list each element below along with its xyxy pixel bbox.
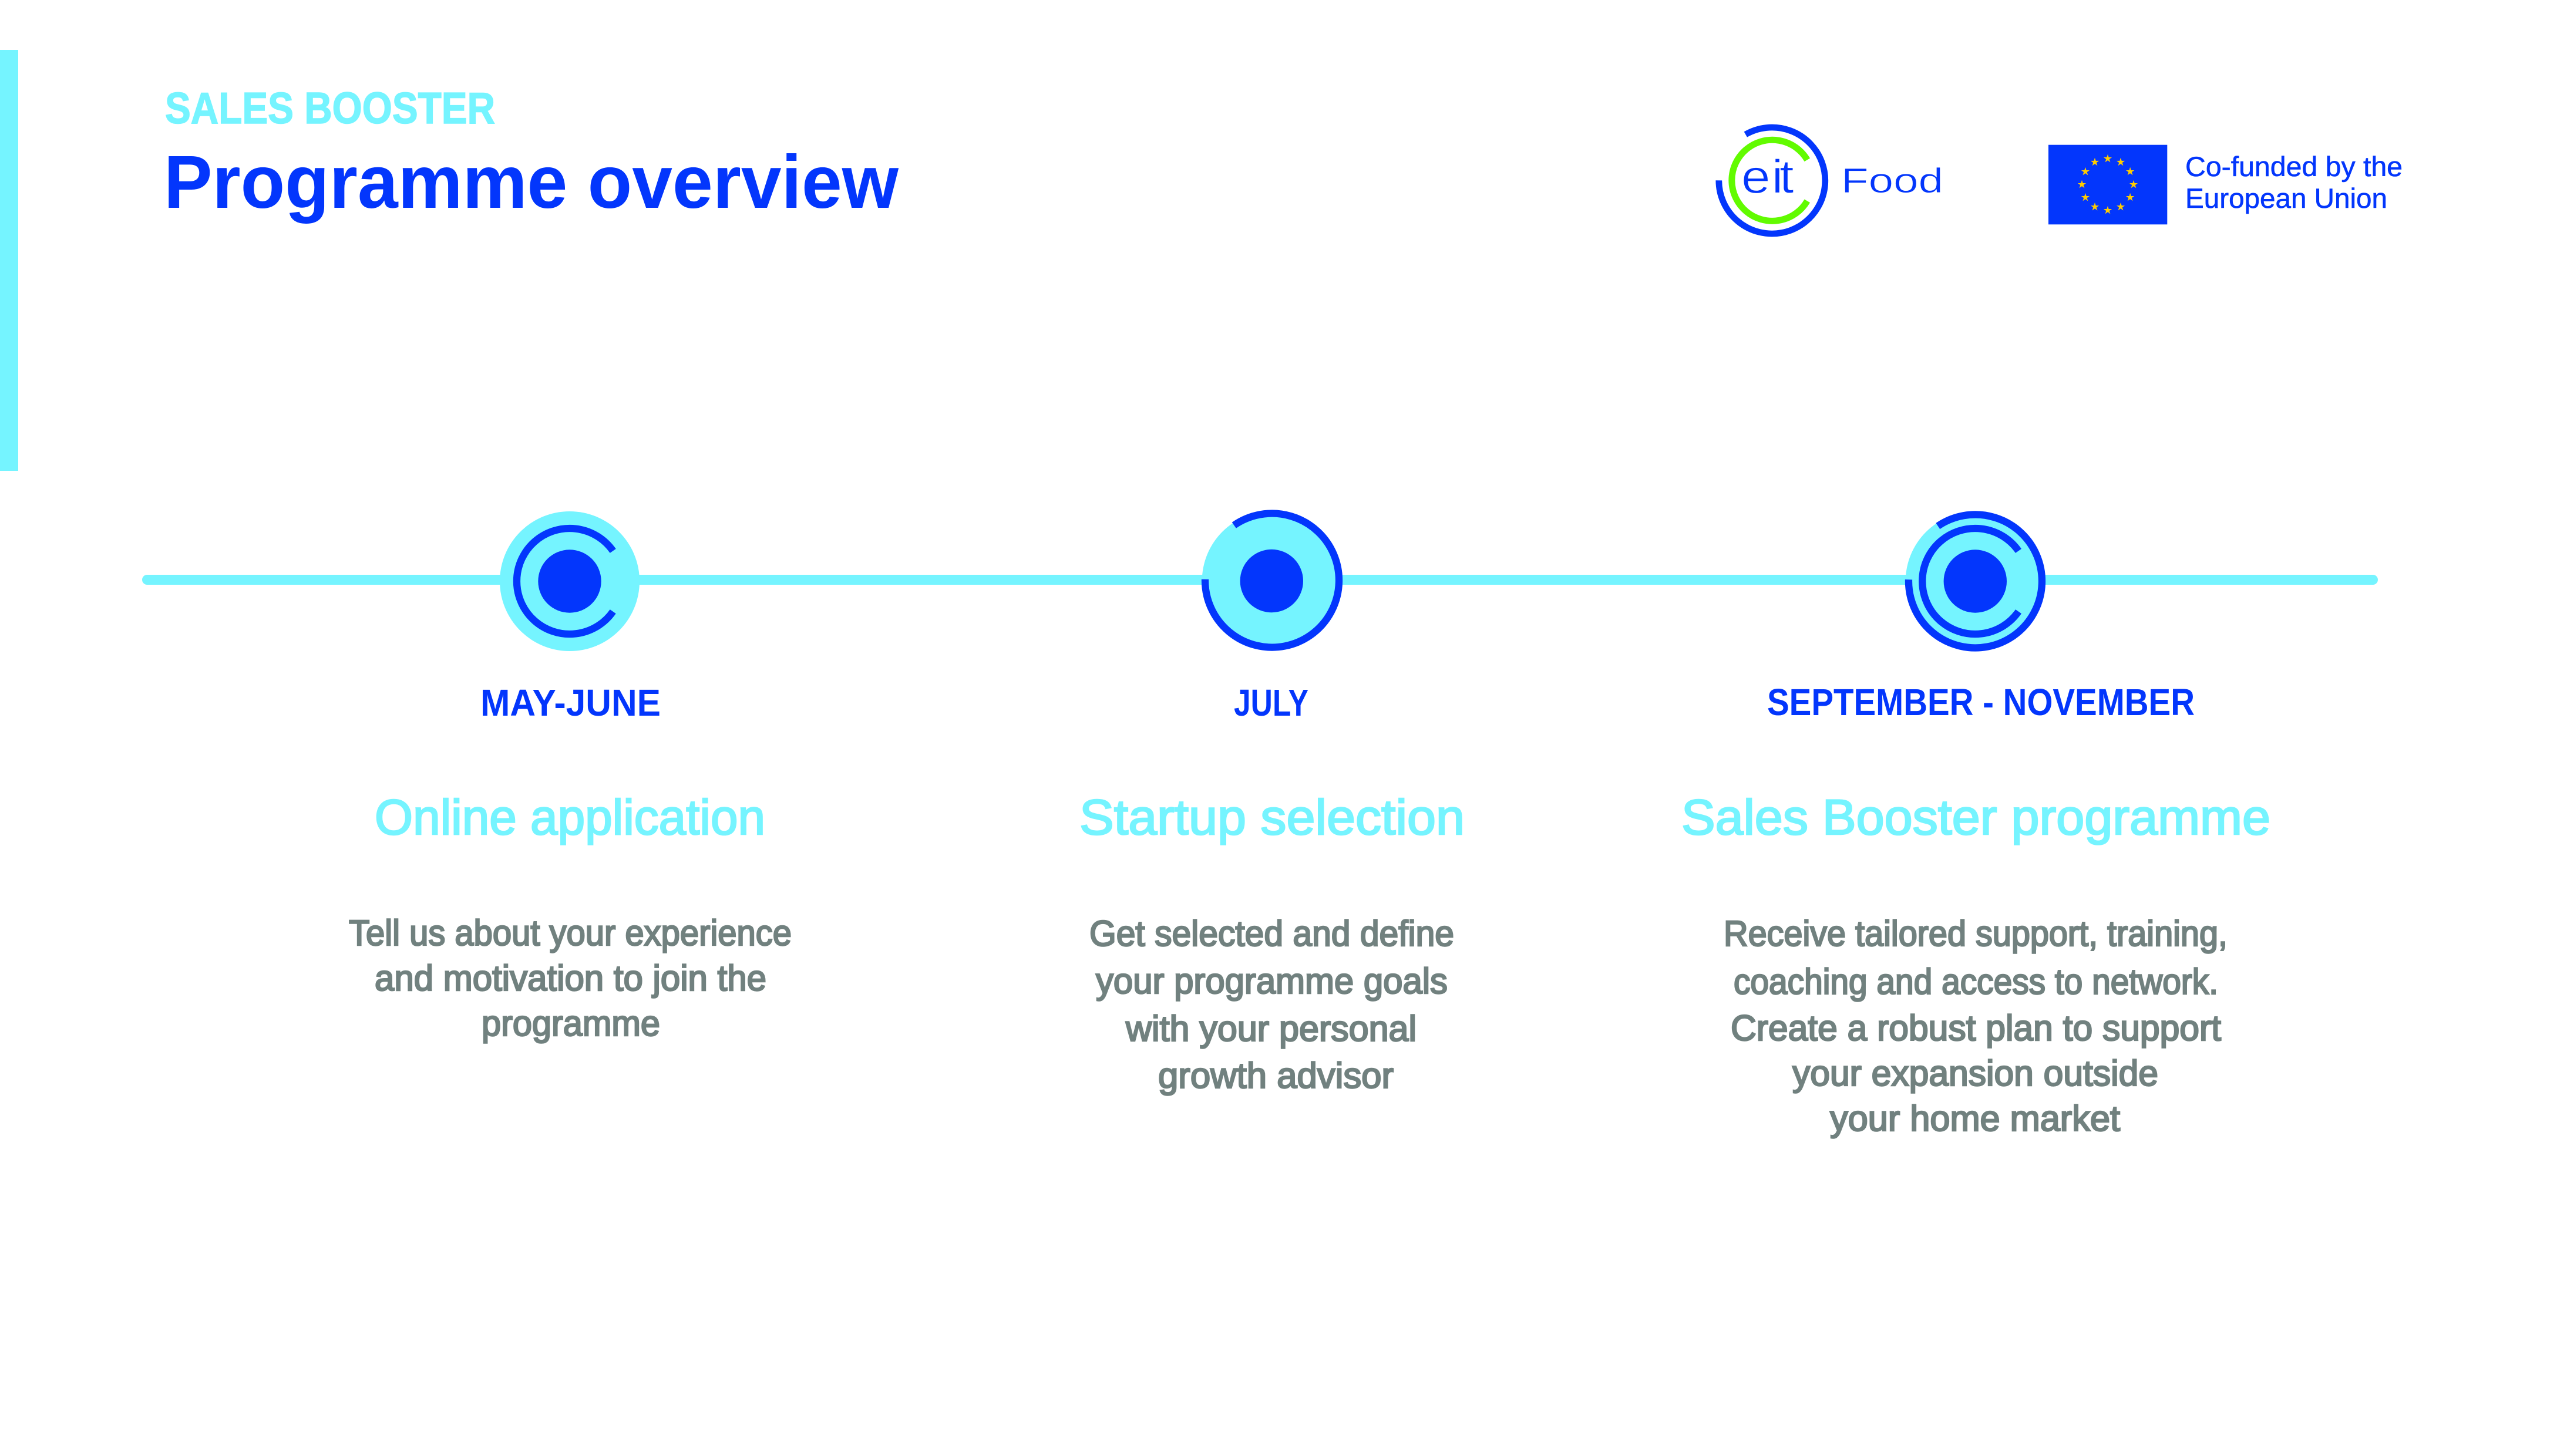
heading: online application: Online application xyxy=(375,790,765,845)
description: step 2: with your personal xyxy=(1125,1009,1417,1049)
icon: step 2 marker xyxy=(1202,511,1341,651)
logo blue arc xyxy=(1719,127,1825,234)
description: step 2 xyxy=(1089,914,1454,1096)
EU flag xyxy=(2048,145,2167,224)
co-funded text: Co-funded by the xyxy=(2185,151,2403,182)
title: Programme overview xyxy=(164,140,899,224)
logo text Food: Food xyxy=(1841,161,1943,200)
description: step 1: Tell us about your experience xyxy=(349,913,792,953)
heading: sales booster programme: Sales Booster programme xyxy=(1681,790,2270,845)
header titles xyxy=(164,83,899,224)
logo green arc xyxy=(1732,140,1807,221)
date: july: JULY xyxy=(1234,682,1308,724)
heading: startup selection: Startup selection xyxy=(1079,790,1465,845)
description: step 3: coaching and access to network. xyxy=(1734,962,2218,1002)
panel: step 2 july xyxy=(1079,511,1465,1096)
accent bar xyxy=(0,50,18,471)
description: step 3 xyxy=(1724,914,2228,1138)
co-funded text: European Union xyxy=(2185,183,2387,214)
description: step 3: your home market xyxy=(1830,1098,2120,1138)
co-funded text xyxy=(2185,151,2403,214)
description: step 2: growth advisor xyxy=(1158,1056,1394,1096)
panel: step 1 may-june xyxy=(349,511,792,1043)
description: step 3: Receive tailored support, training, xyxy=(1724,914,2228,953)
date: september-november: SEPTEMBER - NOVEMBER xyxy=(1767,681,2195,723)
icon: step 1 marker xyxy=(500,511,640,651)
logo text eit: eit xyxy=(1741,150,1794,203)
description: step 2: Get selected and define xyxy=(1089,914,1454,953)
eyebrow: sales booster: SALES BOOSTER xyxy=(165,83,495,133)
timeline line xyxy=(147,575,2373,585)
description: step 3: your expansion outside xyxy=(1792,1053,2158,1093)
panel: step 3 september-november xyxy=(1681,511,2270,1138)
description: step 1: and motivation to join the xyxy=(375,958,766,998)
description: step 3: Create a robust plan to support xyxy=(1731,1008,2221,1048)
icon: step 3 marker xyxy=(1906,511,2045,651)
logo: EIT Food xyxy=(1719,127,1943,234)
logo: EU flag with co-funded text xyxy=(2048,145,2403,224)
description: step 1: programme xyxy=(482,1003,660,1043)
description: step 2: your programme goals xyxy=(1096,961,1448,1001)
date: may-june: MAY-JUNE xyxy=(480,682,661,724)
description: step 1 xyxy=(349,913,792,1043)
